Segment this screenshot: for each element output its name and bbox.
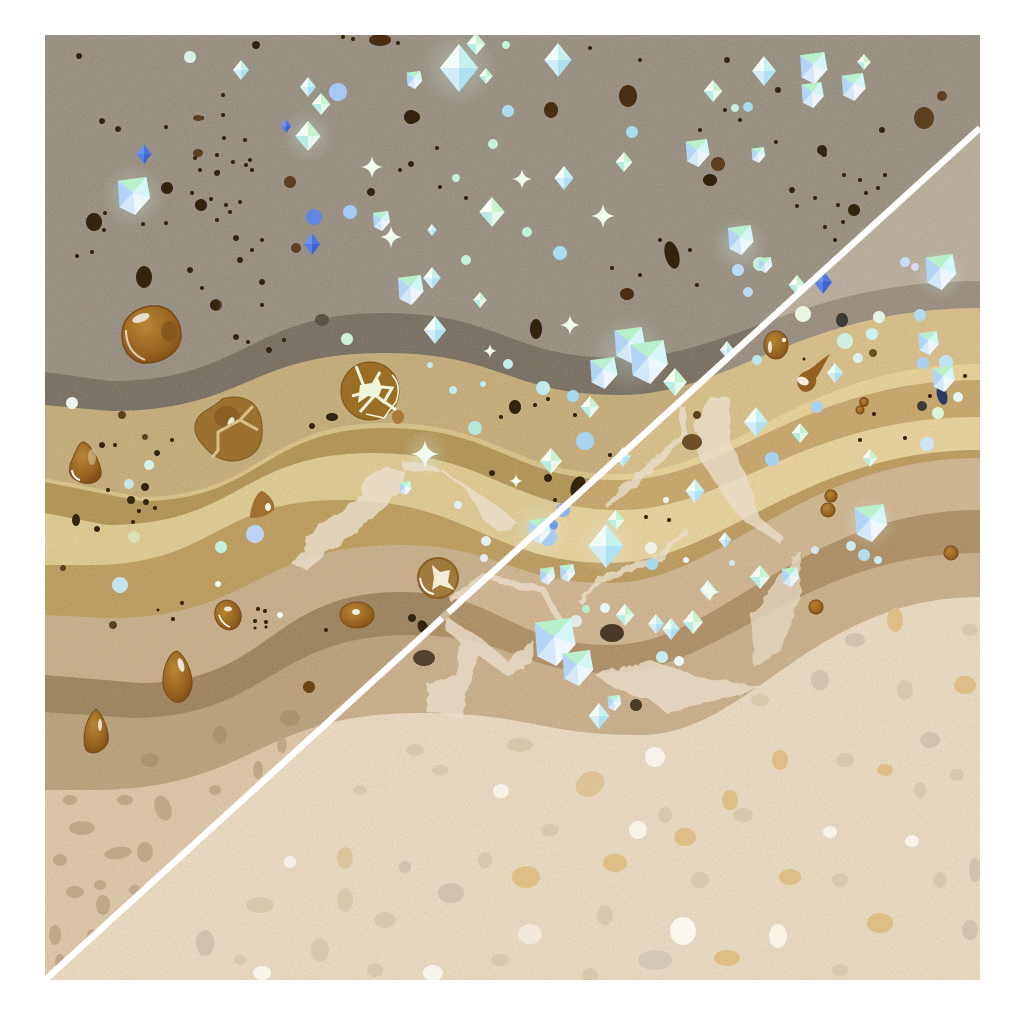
vein: lower band xyxy=(447,617,533,676)
vein: left wash xyxy=(290,467,407,570)
gem glow halos xyxy=(101,30,966,575)
vein: right thin branch xyxy=(580,530,687,603)
pebble: drop 2 xyxy=(250,491,274,518)
pebble: comet shape xyxy=(796,354,830,392)
sand pebbles: right xyxy=(196,608,981,982)
sand pebbles: left xyxy=(49,710,300,970)
pebble: large round xyxy=(122,306,181,363)
vein: far right wash xyxy=(750,550,800,668)
pale mineral veins xyxy=(290,398,800,717)
pebble: cracked square xyxy=(195,397,262,461)
panel: right strata xyxy=(50,132,980,980)
vein: mid bottom xyxy=(593,660,762,713)
vein: big right xyxy=(695,398,785,542)
texture: sand speckle xyxy=(45,590,980,980)
pebble: round white cracks xyxy=(341,362,399,420)
vein: left to line xyxy=(400,460,517,533)
pebble: oval small xyxy=(211,596,245,634)
crystals xyxy=(118,33,956,729)
pebble: small drop xyxy=(84,709,108,753)
glossy brown pebbles xyxy=(69,306,958,753)
vein: upper thin branch xyxy=(450,577,563,623)
dark specks xyxy=(60,34,967,711)
pebble: tall drop xyxy=(163,651,192,702)
small beads xyxy=(809,398,958,614)
vein: upper middle xyxy=(607,407,683,507)
vein: lower blob xyxy=(427,640,480,717)
pebble: right oval xyxy=(764,331,788,359)
pebble: drop 1 xyxy=(69,442,101,483)
round crystal beads xyxy=(66,41,963,666)
pebble: ringed sphere xyxy=(418,558,458,598)
diagonal white divider xyxy=(45,128,980,980)
pebble: oval wide xyxy=(340,602,374,628)
